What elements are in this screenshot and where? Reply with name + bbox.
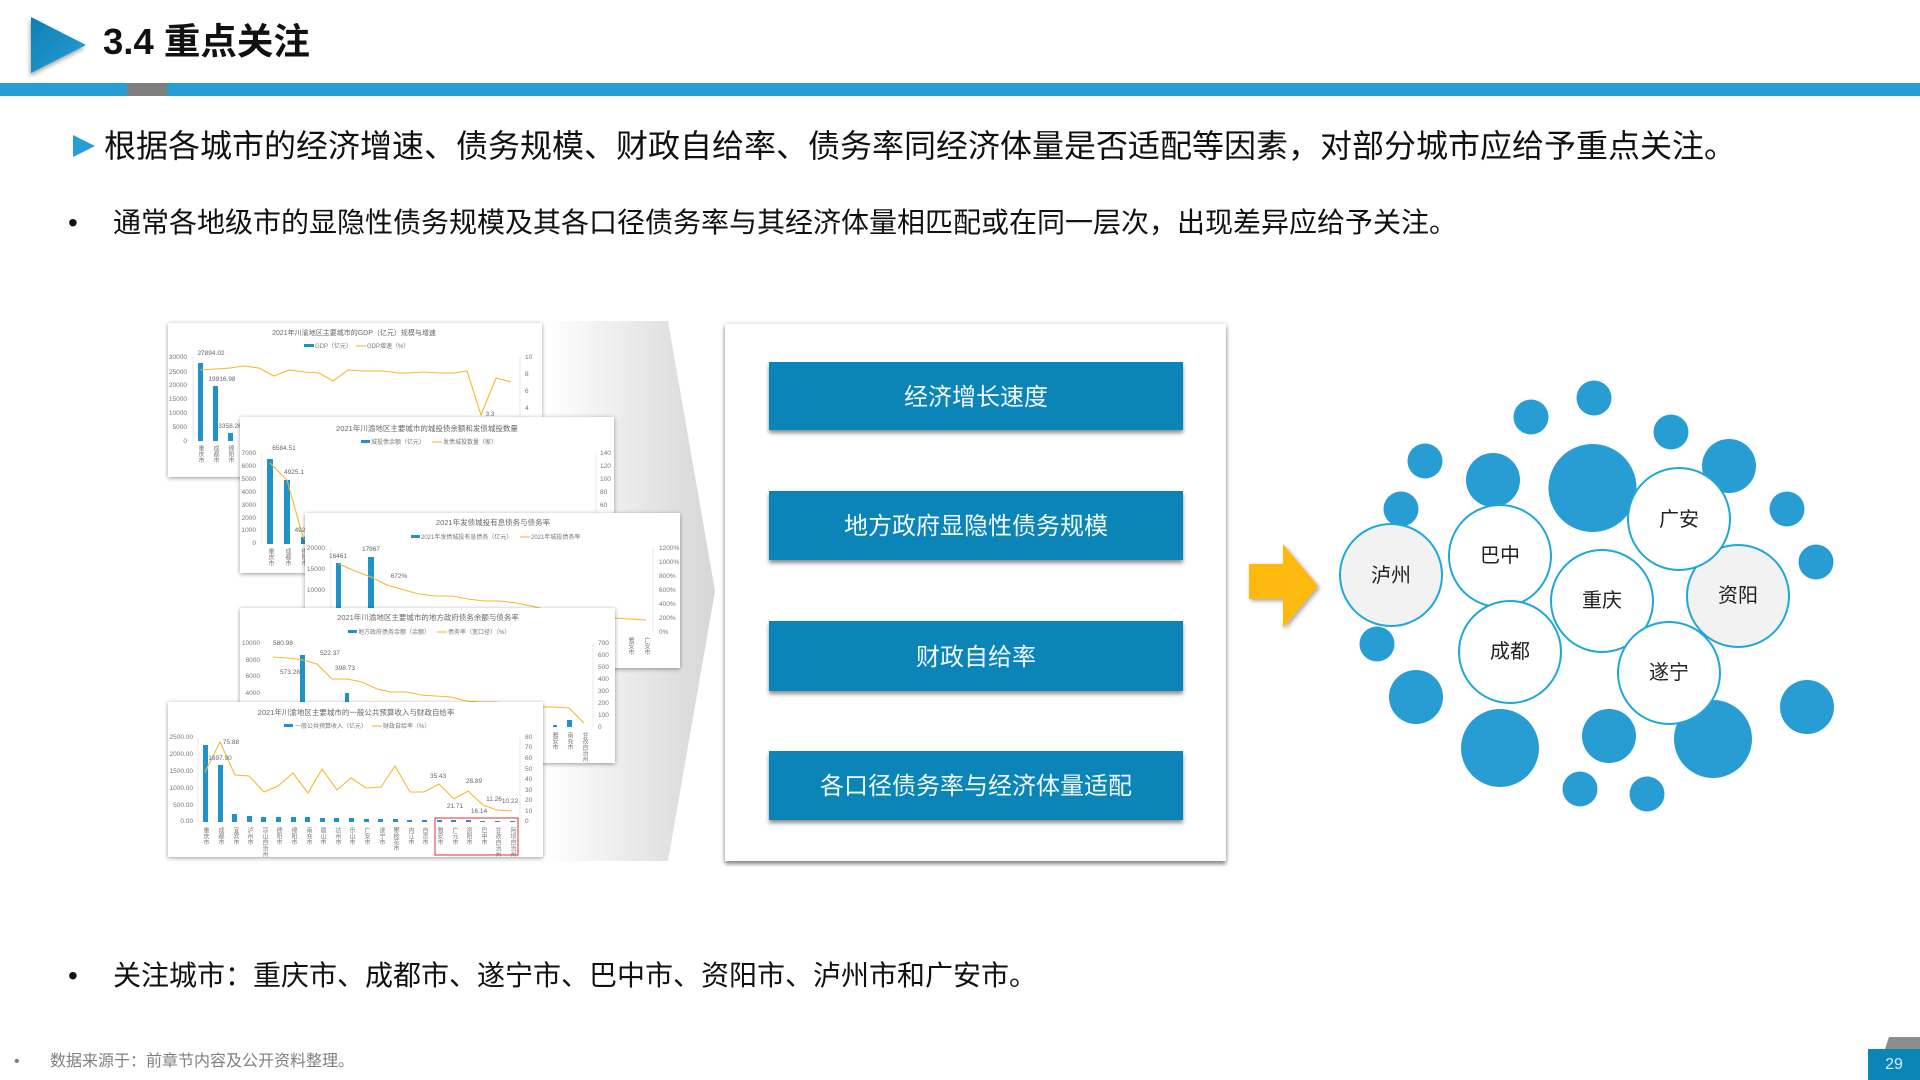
city bubble: 资阳: 资阳 [1718,584,1758,607]
chart: fiscal self-sufficiency: 眉山市 [319,827,326,846]
chart: local government debt: 4000 [246,690,260,697]
chart: hidden debt: 2021年发债城投有息债务（亿元） [421,533,512,541]
city bubble: 广安: 广安 [1659,508,1699,531]
chart: fiscal self-sufficiency: 1000.00 [170,785,193,792]
factor: government debt size: 地方政府显隐性债务规模 [844,513,1108,540]
factor: fiscal self-sufficiency: 财政自给率 [916,644,1036,670]
chart: fiscal self-sufficiency: 28.89 [466,778,483,785]
chart: urban investment debt: 6000 [242,463,256,470]
bullet text: matching rule: • [68,207,78,238]
chart: hidden debt: 400% [659,601,676,608]
chart: fiscal self-sufficiency: 70 [525,744,533,751]
chart: hidden debt: 17967 [362,546,380,553]
chart: fiscal self-sufficiency: 阿坝自治州 [509,826,516,857]
chart: GDP: 20000 [169,382,187,389]
chart: fiscal self-sufficiency: 财政自给率（%） [383,722,430,730]
chart: local government debt: 雅安市 [551,731,558,751]
chart: fiscal self-sufficiency: 20 [525,797,533,804]
chart: fiscal self-sufficiency [168,702,543,857]
chart: local government debt: 522.37 [320,650,340,657]
chart: fiscal self-sufficiency: 资阳市 [465,826,472,846]
chart: fiscal self-sufficiency: 0.00 [180,818,193,825]
footnote: • [14,1053,20,1070]
footnote: 数据来源于：前章节内容及公开资料整理。 [50,1053,354,1070]
chart: hidden debt: 广安市 [643,636,650,656]
chart: hidden debt: 600% [659,587,676,594]
chart: fiscal self-sufficiency: 2500.00 [170,734,193,741]
chart: fiscal self-sufficiency: 一般公共预算收入（亿元） [295,722,367,730]
city bubble: 巴中 [1449,505,1551,607]
red highlight box [435,818,518,855]
chart: GDP: 19916.98 [208,376,236,383]
chart: fiscal self-sufficiency: 40 [525,776,533,783]
chart: urban investment debt: 80 [600,489,608,496]
city bubble: 重庆 [1551,550,1653,652]
chart: local government debt: 200 [598,700,609,707]
chart: urban investment debt: 2000 [242,515,256,522]
chart: fiscal self-sufficiency: 60 [525,755,533,762]
chart: fiscal self-sufficiency: 甘孜自治州 [494,826,501,857]
chart: fiscal self-sufficiency: 成都市 [217,826,224,846]
chart: GDP [168,323,542,477]
chart: fiscal self-sufficiency: 攀枝花市 [392,826,399,852]
chart: hidden debt: 1000% [659,559,679,566]
icon: subheading triangle [73,135,95,157]
chart: urban investment debt: 重庆市 [267,547,274,567]
chart: GDP: 3358.26 [218,423,242,430]
chart: hidden debt: 0% [659,629,669,636]
city bubble: 遂宁 [1618,622,1720,724]
chart: fiscal self-sufficiency: 乐山市 [348,827,355,846]
chart: local government debt: 100 [598,712,609,719]
chart: fiscal self-sufficiency: 凉山自治州 [261,826,268,857]
chart: fiscal self-sufficiency: 广元市 [451,826,458,846]
chart: GDP: 27894.02 [197,350,225,357]
chart: fiscal self-sufficiency: 绵阳市 [290,826,297,846]
factor: government debt size [769,491,1183,560]
chart: fiscal self-sufficiency: 自贡市 [421,826,428,846]
chart: GDP: 绵阳市 [227,444,234,464]
chart: urban investment debt: 140 [600,450,611,457]
chart: urban investment debt: 492 [295,527,306,534]
chart: GDP: 3.3 [485,411,495,418]
chart: fiscal self-sufficiency: 75.88 [223,739,240,746]
chart: local government debt: 南充市 [566,731,573,751]
chart: fiscal self-sufficiency: 雅安市 [436,826,443,846]
factor: economic growth: 经济增长速度 [904,384,1048,410]
factor: fiscal self-sufficiency [769,621,1183,691]
chart: GDP: 0 [183,438,187,445]
chart: local government debt [240,608,615,763]
chart: local government debt: 债务率（宽口径）（%） [448,628,510,636]
chart: GDP: 30000 [169,354,187,361]
chart: local government debt: 400 [598,676,609,683]
title: 3.4 重点关注 [103,21,310,62]
chart: GDP: 15000 [169,396,187,403]
chart: hidden debt: 2021年发债城投有息债务与债务率 [436,517,551,527]
page tab accent [1885,1037,1920,1049]
page number: 29 [1885,1056,1903,1073]
chart: GDP: 2021年川渝地区主要城市的GDP（亿元）规模与增速 [272,328,436,337]
chart: GDP: 25000 [169,369,187,376]
chart: local government debt: 地方政府债务余额（余额） [358,628,430,636]
chart: hidden debt: 200% [659,615,676,622]
subheading: 根据各城市的经济增速、债务规模、财政自给率、债务率同经济体量是否适配等因素，对部分城市应给予重点关注。 [104,128,1736,164]
chart: fiscal self-sufficiency: 2000.00 [170,751,193,758]
chart: local government debt: 甘孜自治州 [581,731,588,762]
chart: hidden debt: 雅安市 [627,636,634,656]
chart: local government debt: 2021年川渝地区主要城市的地方政府债务余额与债务率 [337,612,519,622]
chart: GDP: 4 [525,405,529,412]
city bubble: 巴中: 巴中 [1480,544,1520,567]
grey gradient pentagon [480,321,715,861]
chart: fiscal self-sufficiency: 50 [525,766,533,773]
city bubble: 广安 [1628,468,1730,570]
chart: local government debt: 8000 [246,657,260,664]
panel: focus factors [725,324,1226,861]
chart: hidden debt: 1200% [659,545,679,552]
chart: hidden debt: 2021年城投债务率 [531,533,580,541]
city bubble: 泸州 [1340,524,1442,626]
chart: fiscal self-sufficiency: 80 [525,734,533,741]
chart: local government debt: 600 [598,652,609,659]
chart: urban investment debt: 0 [252,540,256,547]
city bubble: 成都 [1459,601,1561,703]
chart: fiscal self-sufficiency: 1500.00 [170,768,193,775]
chart: urban investment debt: 绵阳市 [300,547,307,567]
chart: fiscal self-sufficiency: 遂宁市 [378,826,385,846]
chart: fiscal self-sufficiency: 泸州市 [246,826,253,846]
chart: fiscal self-sufficiency: 德阳市 [275,826,282,846]
chart: urban investment debt: 成都市 [284,547,291,567]
chart: urban investment debt: 60 [600,502,608,509]
chart: urban investment debt: 城投债余额（亿元） [371,438,425,446]
header rule grey tab [127,83,167,96]
bullet text: focus cities: 关注城市：重庆市、成都市、遂宁市、巴中市、资阳市、泸州市和广安市。 [113,960,1037,991]
chart: hidden debt: 672% [391,573,408,580]
chart: fiscal self-sufficiency: 11.26 [486,796,502,803]
chart: GDP: 重庆市 [197,444,204,464]
factor: debt ratio fit: 各口径债务率与经济体量适配 [820,773,1132,800]
factor: debt ratio fit [769,751,1183,820]
chart: hidden debt: 20000 [307,545,325,552]
chart: fiscal self-sufficiency: 16.14 [471,808,488,815]
chart: local government debt: 300 [598,688,609,695]
chart: fiscal self-sufficiency: 2021年川渝地区主要城市的一般公共预算收入与财政自给率 [258,707,455,717]
chart: urban investment debt: 5000 [242,476,256,483]
chart: local government debt: 398.73 [335,665,355,672]
chart: local government debt: 10000 [242,640,260,647]
chart: GDP: 成都市 [212,444,219,464]
chart: urban investment debt: 100 [600,476,611,483]
chart: fiscal self-sufficiency: 达州市 [334,826,341,846]
chart: GDP: 6 [525,388,529,395]
chart: GDP: 10000 [169,410,187,417]
chart: local government debt: 580.98 [273,640,293,647]
chart: urban investment debt: 2021年川渝地区主要城市的城投债余额和发债城投数量 [336,423,518,433]
city bubble: 成都: 成都 [1490,640,1530,663]
chart: GDP: GDP增速（%） [367,342,409,350]
city bubble: 泸州: 泸州 [1371,564,1411,587]
factor: economic growth [769,362,1183,430]
background bubbles [1360,380,1834,812]
chart: urban investment debt: 3000 [242,502,256,509]
chart: fiscal self-sufficiency: 500.00 [173,802,193,809]
chart: hidden debt: 10000 [307,587,325,594]
chart: fiscal self-sufficiency: 重庆市 [202,826,209,846]
chart: local government debt: 6000 [246,673,260,680]
chart: GDP: GDP（亿元） [315,342,352,350]
chart: urban investment debt: 发债城投数量（家） [443,438,497,446]
chart: fiscal self-sufficiency: 10.22 [502,798,519,805]
chart: fiscal self-sufficiency: 巴中市 [480,827,487,846]
page number [1868,1049,1920,1080]
chart: urban investment debt: 120 [600,463,611,470]
chart: fiscal self-sufficiency: 35.43 [430,773,447,780]
bubble cluster [1339,380,1834,812]
chart: local government debt: 700 [598,640,609,647]
chart: urban investment debt: 7000 [242,450,256,457]
chart: fiscal self-sufficiency: 21.71 [447,803,464,810]
chart: GDP: 8 [525,371,529,378]
chart: fiscal self-sufficiency: 30 [525,787,533,794]
chart: urban investment debt: 4925.1 [284,469,304,476]
chart: local government debt: 0 [598,724,602,731]
chart: GDP: 10 [525,354,533,361]
arrow [1248,544,1322,630]
chart: fiscal self-sufficiency: 1697.90 [208,755,232,762]
chart: urban investment debt: 4000 [242,489,256,496]
chart: hidden debt [305,513,680,668]
chart: local government debt: 573.28 [280,669,300,676]
chart: fiscal self-sufficiency: 10 [525,808,533,815]
chart: fiscal self-sufficiency: 0 [525,818,529,825]
chart: fiscal self-sufficiency: 宜宾市 [232,826,239,846]
chart: fiscal self-sufficiency: 南充市 [305,826,312,846]
chart: urban investment debt: 6584.51 [272,445,296,452]
chart: urban investment debt: 1000 [242,527,256,534]
city bubble: 重庆: 重庆 [1582,589,1622,612]
chart: urban investment debt [240,417,614,573]
chart: hidden debt: 16461 [329,553,347,560]
icon: header triangle [27,17,86,78]
chart stack with grey pentagon [165,321,715,861]
chart: GDP: 5000 [173,424,187,431]
chart: local government debt: 500 [598,664,609,671]
bullet text: focus cities: • [68,960,78,991]
bullet text: matching rule: 通常各地级市的显隐性债务规模及其各口径债务率与其经济体量相匹配或在同一层次，出现差异应给予关注。 [113,207,1457,238]
chart: hidden debt: 15000 [307,566,325,573]
chart: hidden debt: 800% [659,573,676,580]
chart: fiscal self-sufficiency: 内江市 [407,826,414,846]
chart: fiscal self-sufficiency: 广安市 [363,826,370,846]
header rule [0,83,1920,96]
city bubble: 资阳 [1687,545,1789,647]
city bubble: 遂宁: 遂宁 [1649,661,1689,684]
